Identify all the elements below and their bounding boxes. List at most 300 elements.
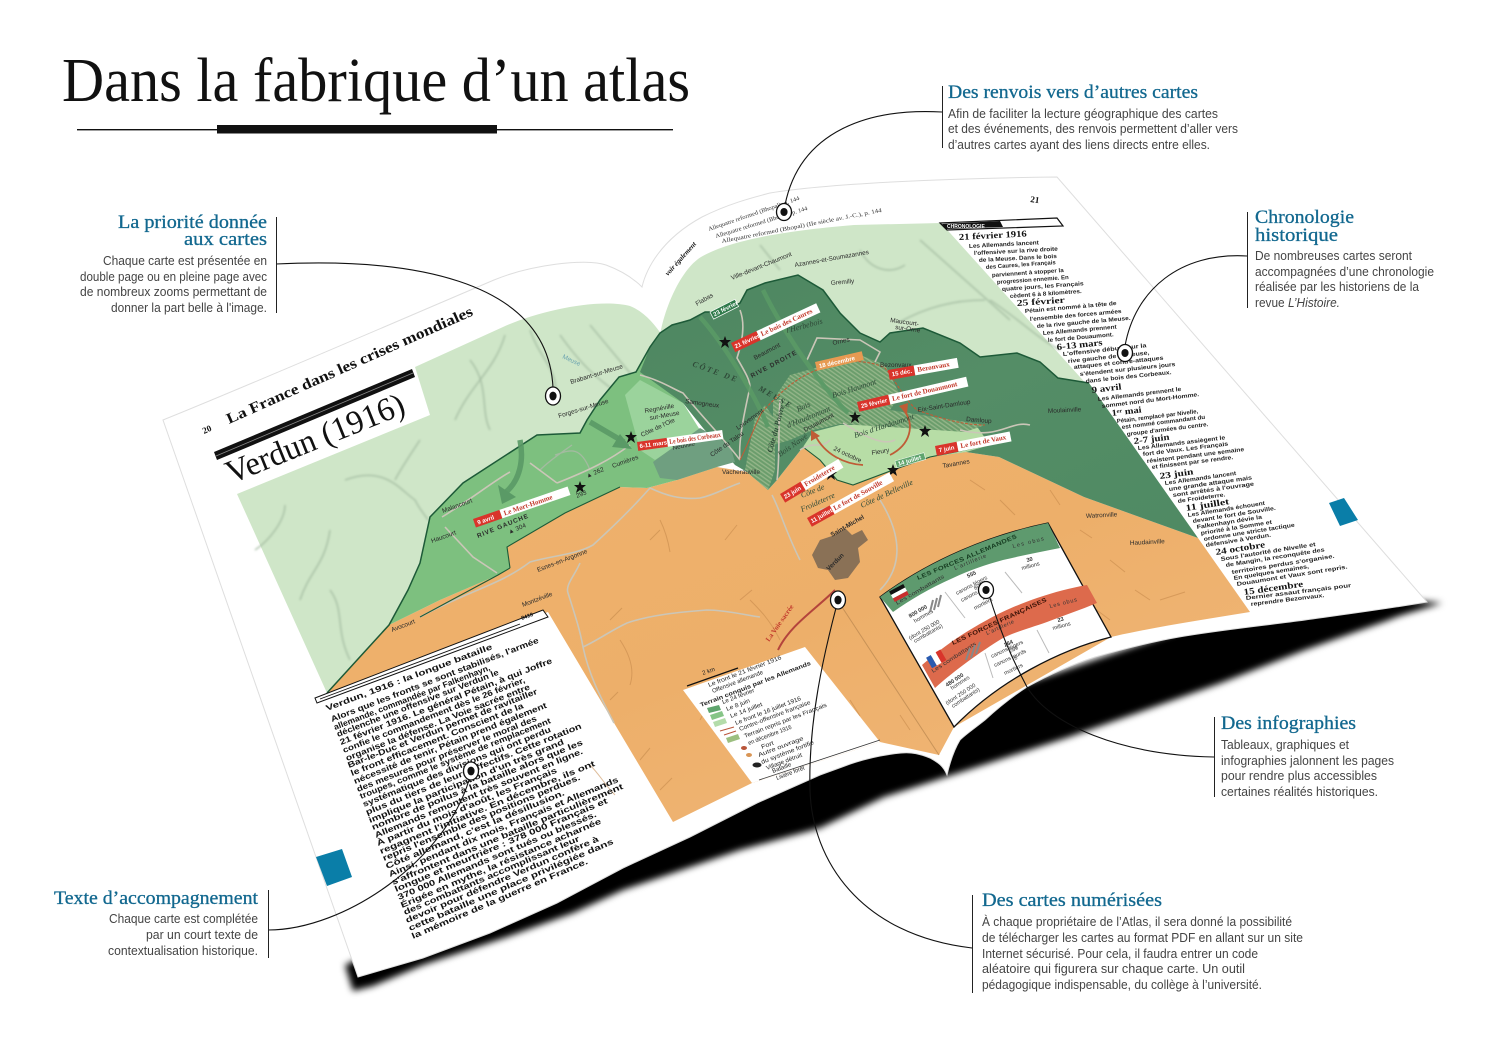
infographic panel: 800 000	[908, 604, 929, 620]
callout: texte d'accompagnement: Chaque carte est complétée	[109, 912, 258, 926]
callout: des infographies: infographies jalonnent les pages	[1221, 754, 1394, 768]
callout: des renvois vers d'autres cartes: Des renvois vers d’autres cartes	[948, 82, 1198, 103]
red battle labels: Le fort de Douaumont	[891, 380, 959, 403]
right page header and chronology column: 21	[1030, 194, 1041, 205]
infographic panel: LES FORCES ALLEMANDES	[916, 534, 1018, 582]
map place names: Louvemont	[735, 408, 765, 432]
right page header and chronology column: En quelques semaines,	[1233, 564, 1310, 582]
right page header and chronology column: 9 avril	[1091, 381, 1123, 395]
accompanying text box: Verdun, 1916 : la longue bataille	[325, 642, 494, 713]
map place names: Avocourt	[390, 618, 416, 634]
legend: du système fortifié	[761, 740, 816, 766]
red battle labels: 21 février	[734, 333, 761, 350]
map place names: Ornes	[832, 336, 850, 347]
red battle labels: 14 juillet	[897, 455, 922, 468]
right page header and chronology column: Les Allemands prennent	[1043, 325, 1117, 337]
red battle labels: Le fort de Souville	[832, 479, 884, 512]
right page header and chronology column: 21 février 1916	[959, 228, 1028, 242]
map place names: La Voie sacrée	[764, 603, 795, 643]
right page header and chronology column: Les Allemands prennent le	[1098, 387, 1182, 403]
callout: la priorité donnée aux cartes: aux cartes	[184, 229, 267, 250]
red battle labels: Le bois des Corbeaux	[669, 431, 722, 446]
right page header and chronology column: le fort de Douaumont.	[1048, 332, 1114, 344]
callout: texte d'accompagnement: par un court texte de	[146, 928, 258, 942]
right page header and chronology column: reprendre Bezonvaux.	[1251, 593, 1325, 608]
right page header and chronology column: est nommé commandant du	[1122, 415, 1206, 431]
callout line: renvois	[776, 112, 942, 220]
legend: en décembre 1916	[748, 725, 793, 747]
accompanying text box: longue et meurtrière : 378 000 Français et	[393, 796, 609, 894]
map place names: Watronville	[1086, 511, 1118, 520]
infographic panel: canons légers	[990, 640, 1025, 660]
accompanying text box: regagnent l'initiative. En décembre, ils ont	[378, 759, 597, 856]
right page header and chronology column: Dernier assaut français pour	[1246, 583, 1352, 602]
map place names: Bois Nawé	[776, 431, 810, 459]
red battle labels: 9 avril	[477, 515, 495, 527]
infographic panel: 480 000	[945, 673, 965, 689]
accompanying text box	[315, 610, 625, 941]
infographic panel: L'artillerie	[954, 554, 987, 572]
map place names: 293	[575, 489, 588, 500]
right page header and chronology column: Pétain est nommé à la tête de	[1025, 301, 1118, 315]
battle stars	[574, 336, 931, 493]
map place names: Brabant-sur-Meuse	[570, 363, 624, 386]
map place names: Côte de Belleville	[859, 477, 915, 510]
map place names: Samogneux	[685, 398, 720, 410]
infographic panel: 23	[1057, 617, 1065, 624]
light green zone near Charny	[625, 380, 700, 460]
map place names: Côte de l'Oie	[640, 417, 677, 439]
callout: chronologie historique: Chronologie	[1255, 207, 1354, 228]
map place names: Maucourt-	[890, 317, 919, 328]
red battle labels	[473, 299, 1012, 528]
right page header and chronology column: 23 juin	[1159, 466, 1194, 481]
accompanying text box: la mémoire de la guerre en France.	[410, 857, 589, 941]
Voie sacrée road	[778, 590, 835, 650]
red battle labels: Le Mort-Homme	[503, 493, 554, 517]
map place names: ▲ 262	[585, 466, 606, 480]
infographic panel: Les combattants	[931, 641, 978, 675]
right page header and chronology column: 2-7 juin	[1133, 432, 1170, 446]
right page header and chronology column	[664, 194, 1352, 608]
callout: texte d'accompagnement: Texte d’accompagnement	[54, 888, 259, 909]
accompanying text box: À partir du mois d'août, les Français	[375, 765, 559, 848]
accompanying text box: Alors que les fronts se sont stabilisés, l'armée	[329, 636, 540, 724]
right page header and chronology column: CHRONOLOGIE	[947, 224, 985, 230]
red battle labels: 23 février	[713, 300, 740, 318]
infographic panel: mortiers	[973, 597, 994, 612]
red battle labels: Bezonvaux	[917, 360, 951, 374]
map place names: Verdun	[825, 552, 846, 572]
right page header and chronology column: voir également	[664, 240, 699, 277]
page header left: La France dans les crises mondiales	[224, 304, 476, 428]
right page header and chronology column: s'étendent sur plusieurs jours	[1080, 362, 1176, 378]
callout line: chronologie	[1118, 256, 1247, 362]
map place names: Damloup	[966, 416, 992, 425]
map place names: 24 octobre	[832, 445, 863, 465]
right page header and chronology column: de la Meuse. Dans le bois	[979, 254, 1057, 264]
callout: des renvois vers d'autres cartes: d’autres cartes ayant des liens directs entre elles.	[948, 138, 1210, 152]
right page header and chronology column: Sous l'autorité de Nivelle et	[1220, 542, 1316, 563]
accompanying text box: déclenche une offensive sur Verdun le	[335, 668, 500, 739]
right page header and chronology column: une grande attaque mais	[1168, 475, 1252, 493]
map place names: RIVE DROITE	[750, 349, 799, 380]
orange terrain	[327, 447, 1250, 822]
red battle labels: 7 juin	[939, 445, 955, 454]
legend: Le 24 février	[722, 688, 755, 706]
right page header and chronology column: devant le fort de Souville.	[1192, 506, 1277, 525]
right page header and chronology column: territoires perdus s'organise.	[1231, 554, 1336, 576]
Verdun town	[812, 528, 868, 580]
marker	[830, 591, 846, 609]
German offensive arrows	[506, 290, 848, 492]
legend: Le front le 21 février 1916	[708, 655, 783, 689]
legend: Bataille	[772, 762, 793, 775]
red battle labels: 23 juin	[783, 486, 803, 501]
map place names: d'Haudromont	[785, 404, 832, 430]
infographic panel: Les obus	[1012, 536, 1045, 550]
legend: 2 km	[702, 667, 716, 677]
infographic panel: canons lourds	[960, 582, 994, 604]
infographic panel: 8	[1013, 655, 1019, 662]
map place names: sur-Orne	[895, 324, 921, 335]
blue tab left	[316, 849, 352, 886]
legend: Terrain repris par les Français	[744, 703, 828, 740]
map place names: Côte de	[799, 482, 826, 500]
infographic panel: canons légers	[955, 575, 989, 597]
callout: la priorité donnée aux cartes: double page ou en pleine page avec	[80, 270, 267, 284]
right page header and chronology column: Allequatre reformed (Bhopal), p. 144	[707, 195, 800, 233]
infographic panel: millions	[1052, 621, 1072, 632]
roads in green	[442, 310, 1030, 573]
right page header and chronology column: fort de Vaux. Les Français	[1143, 442, 1229, 458]
accompanying text box: cette bataille une place privilégiée dans	[407, 837, 615, 933]
callout: des infographies: certaines réalités historiques.	[1221, 785, 1378, 799]
light green zone near Fleury	[803, 425, 990, 485]
right page header and chronology column: résistent pendant une semaine	[1147, 447, 1245, 465]
callout: la priorité donnée aux cartes: La priorité donnée	[118, 212, 267, 233]
right page header and chronology column: des Caures, les Français	[986, 260, 1056, 271]
accompanying text box: Bar-le-Duc et Verdun permet de ravitailler	[346, 687, 540, 770]
map place names: Eix-Saint-Damloup	[917, 399, 971, 414]
right page header and chronology column: attaques et contre-attaques	[1074, 356, 1164, 371]
map place names: CÔTE DE	[691, 358, 740, 384]
infographic panel: 800	[973, 582, 984, 592]
callout: des renvois vers d'autres cartes: Afin de faciliter la lecture géographique des cartes	[948, 107, 1218, 121]
map place names: Tavannes	[942, 458, 970, 470]
callout line: cartes numérisées	[810, 591, 972, 948]
accompanying text box: allemande, commandée par Falkenhayn,	[332, 663, 492, 732]
right page header and chronology column: Les Allemands lancent	[1164, 471, 1237, 487]
map place names: Bezonvaux	[880, 362, 912, 369]
map	[237, 223, 1250, 822]
accompanying text box: confie le commandement dès le 26 février,	[341, 676, 526, 755]
marker	[776, 204, 792, 220]
callout: des cartes numérisées: pédagogique indispensable, du collège à l’université.	[982, 978, 1262, 992]
callout: des renvois vers d'autres cartes: et des événements, des renvois permettent d’aller vers	[948, 122, 1238, 136]
French flag	[926, 650, 946, 668]
legend: Le 8 juin	[726, 698, 751, 713]
infographic panel: millions	[1021, 561, 1041, 572]
right page header and chronology column: Les Allemands échouent	[1187, 501, 1265, 519]
right page header and chronology column: progression ennemie. En	[997, 275, 1069, 286]
callout: des infographies	[1214, 713, 1394, 799]
right page header and chronology column: l'offensive sur la rive droite	[974, 247, 1059, 257]
map place names: Montzéville	[521, 591, 554, 609]
right page header and chronology column: groupe d'armées du centre.	[1127, 422, 1209, 438]
accompanying text box: des mesures pour préserver le moral des	[355, 714, 539, 794]
right page header and chronology column: de la rive gauche de la Meuse.	[1037, 316, 1131, 330]
map place names: Beaumont	[753, 342, 782, 362]
callout: chronologie historique: réalisée par les historiens de la	[1255, 280, 1419, 294]
callout: la priorité donnée aux cartes	[80, 212, 277, 315]
accompanying text box: nécessité de tenir, Pétain prend également	[352, 701, 548, 786]
accompanying text box: 21 février 1916. Le général Pétain, à qui Joffre	[338, 656, 554, 747]
map place names: Côte du Talou	[709, 430, 746, 459]
callout: la priorité donnée aux cartes: Chaque carte est présentée en	[103, 254, 267, 268]
right page header and chronology column: sommet nord du Mort-Homme.	[1102, 392, 1200, 410]
infographic panel: 203	[981, 592, 992, 602]
map place names: sur-Meuse	[649, 410, 681, 422]
right page header and chronology column: Les Allemands assiègent le	[1138, 435, 1226, 452]
red battle labels: Le fort de Vaux	[960, 433, 1007, 450]
map place names: Forges-sur-Meuse	[558, 398, 610, 420]
infographic panel: 289	[1008, 645, 1019, 655]
right page header and chronology column: 11 juillet	[1185, 496, 1230, 513]
map place names: Malancourt	[441, 497, 474, 515]
infographic panel: 264	[1003, 639, 1015, 649]
legend: Fort	[761, 740, 775, 751]
page header left: 20	[201, 423, 213, 436]
callout: chronologie historique: De nombreuses cartes seront	[1255, 249, 1413, 263]
right page header and chronology column: 15 décembre	[1243, 579, 1304, 597]
legend: Contre-offensive française	[739, 700, 812, 733]
relief pale	[255, 240, 1060, 660]
callout: la priorité donnée aux cartes: donner la part belle à l'image.	[111, 301, 267, 315]
map place names: ▲ 304	[507, 522, 528, 536]
callout: des cartes numérisées	[972, 890, 1303, 993]
legend: Terrain conquis par les Allemands	[700, 661, 813, 709]
right page header and chronology column: l'ensemble des forces armées	[1030, 309, 1122, 323]
right page header and chronology column: 6-13 mars	[1056, 337, 1104, 352]
accompanying text box: plus du tiers de leurs effectifs. Cette rotation	[364, 722, 583, 817]
hill shading	[540, 445, 590, 470]
map place names: Meuse	[561, 353, 582, 368]
map place names: Haucourt	[430, 529, 457, 545]
German flag	[889, 584, 909, 602]
infographic panel: hommes	[913, 609, 935, 625]
infographic panel: (dont 250 000	[945, 683, 977, 707]
accompanying text box: nombre de poilus à la bataille alors que les	[370, 738, 585, 832]
hatch zone Douaumont	[773, 355, 985, 445]
infographic panel: canons lourds	[993, 649, 1028, 669]
mid green Rive gauche	[389, 347, 717, 625]
callout: des cartes numérisées: À chaque propriétaire de l’Atlas, il sera donné la possibilité	[982, 914, 1292, 929]
red battle labels: 18 décembre	[819, 356, 856, 370]
infographic panel: Les obus	[1049, 597, 1078, 610]
callout: des cartes numérisées: aléatoire qui figurera sur chaque carte. Un outil	[982, 962, 1245, 976]
right page header and chronology column: 25 février	[1016, 295, 1065, 308]
red battle labels: Froideterre	[803, 464, 836, 488]
accompanying text box: Allemands remontent très souvent en ligne.	[373, 747, 584, 840]
map place names: Moulainville	[1048, 406, 1082, 415]
legend: Le 14 juillet	[730, 702, 764, 720]
callout line: priorité aux cartes	[276, 263, 560, 405]
page header left: Verdun (1916)	[221, 387, 410, 491]
callout: chronologie historique	[1247, 207, 1434, 310]
infographic panel: combattants)	[951, 687, 981, 710]
callout: des cartes numérisées: Des cartes numérisées	[982, 890, 1162, 911]
grey green zone	[653, 428, 735, 480]
right page header and chronology column: quatre jours, les Français	[1002, 281, 1084, 293]
open atlas shadow	[345, 590, 1442, 991]
right page header and chronology column: ordonne une stricte tactique	[1203, 523, 1296, 543]
red battle labels: Le bois des Caures	[760, 307, 814, 338]
right page header and chronology column: Les Allemands lancent	[969, 240, 1039, 250]
red battle labels: 11 juillet	[810, 508, 834, 525]
pale green area	[237, 303, 680, 693]
callout: des infographies: Tableaux, graphiques et	[1221, 738, 1350, 752]
accompanying text box: systématique des divisions qui ont perdu	[361, 725, 552, 809]
map place names: Bois Haumont	[831, 377, 878, 400]
German band	[880, 523, 1060, 612]
map place names: Cumières	[611, 454, 639, 470]
accompanying text box: Érigée en mythe, la résistance acharnée	[399, 816, 603, 910]
blue tab right	[1329, 498, 1358, 526]
callout: chronologie historique: accompagnées d’une chronologie	[1255, 265, 1434, 279]
right page header and chronology column: dans le bois des Corbeaux.	[1086, 370, 1172, 385]
accompanying text box: 370 000 Allemands sont tués ou blessés.	[396, 810, 598, 902]
legend: Le front le 16 juillet 1916	[735, 696, 803, 727]
red battle labels: 25 février	[861, 398, 889, 410]
legend: Lisière forêt	[776, 765, 806, 782]
right page header and chronology column: rive gauche de la Meuse,	[1068, 350, 1150, 365]
marker	[546, 387, 560, 405]
accompanying text box: s'affrontent dans une bataille particulièrement	[390, 782, 625, 887]
red battle labels: 15 déc.	[891, 369, 913, 378]
callout: des infographies: Des infographies	[1221, 713, 1356, 734]
callout: texte d'accompagnement: contextualisation historique.	[108, 944, 258, 958]
map place names: Saint-Michel	[830, 514, 866, 539]
map place names: Flabas	[694, 292, 715, 308]
right page header and chronology column: cèdent 6 à 8 kilomètres.	[1010, 289, 1082, 300]
red battle labels: 6-11 mars	[639, 440, 668, 450]
callout: la priorité donnée aux cartes: de nombreux zooms permettant de	[80, 285, 267, 299]
map place names	[390, 249, 1165, 643]
legend: Village détruit	[766, 753, 804, 772]
accompanying text box: le front efficacement. Conscient de la	[349, 701, 525, 778]
legend: Autre ouvrage	[758, 736, 805, 759]
callout: des renvois vers d'autres cartes	[942, 82, 1238, 152]
accompanying text box: organise la défense. La Voie sacrée entre	[344, 682, 532, 763]
hatch strip	[745, 405, 775, 490]
map place names: Azannes-et-Soumazannes	[794, 249, 870, 269]
accompanying text box: Ainsi, pendant dix mois, Français et Allemands	[387, 775, 620, 879]
callout: chronologie historique: revue L’Histoire.	[1255, 296, 1340, 310]
open atlas pages	[163, 177, 1427, 977]
marker	[1118, 344, 1132, 362]
infographic panel: hommes	[950, 675, 971, 692]
map place names: Esnes-en-Argonne	[536, 548, 589, 574]
callout: texte d'accompagnement	[54, 888, 269, 958]
right page header and chronology column: Falkenhayn dévie la	[1196, 515, 1263, 531]
accompanying text box: devoir pour défendre Verdun confère à	[404, 834, 601, 925]
right page header and chronology column: de Froideterre.	[1177, 492, 1226, 505]
callout line: infographies	[978, 582, 1214, 757]
relief orange	[420, 480, 1185, 795]
pale green area right page	[660, 223, 1089, 420]
right page header and chronology column: de Mangin, la reconquête des	[1225, 547, 1325, 569]
map place names: Gremilly	[831, 278, 855, 287]
page header left	[201, 304, 476, 491]
accompanying text box: repris l'ensemble des positions perdues.	[381, 773, 582, 863]
callout: des infographies: pour rendre plus accessibles	[1221, 769, 1377, 783]
callout: des cartes numérisées: de télécharger les cartes au format PDF en allant sur un site	[982, 931, 1303, 945]
right page header and chronology column: sont arrêtés à l'ouvrage	[1172, 481, 1255, 499]
map place names: Ville-devant-Chaumont	[730, 251, 793, 282]
accompanying text box: troupes, comme le système de remplacement	[358, 716, 552, 801]
accompanying text box: Côté allemand, c'est la désillusion.	[384, 788, 566, 871]
right page header and chronology column: défensive à Verdun.	[1205, 533, 1272, 549]
right page header and chronology column: Allequatre reformed (Bhopal) (IIe siècle av. J.-C.), p. 144	[721, 207, 882, 245]
map place names: Regnéville	[644, 403, 675, 415]
infographic panel: 30	[1026, 557, 1034, 564]
right page header and chronology column: Pétain, remplacé par Nivelle,	[1117, 409, 1199, 425]
accompanying text box: des combattants accomplissant leur	[402, 834, 582, 917]
map place names: MEUSE	[756, 383, 794, 411]
infographic panel: (dont 250 000	[908, 619, 941, 642]
marker	[978, 582, 994, 598]
map place names: Bois	[795, 400, 812, 414]
map place names: Neuville	[672, 440, 696, 452]
map place names: Haudainville	[1130, 538, 1165, 547]
infographic panel: 555	[966, 570, 977, 580]
accompanying text box: 8410	[521, 612, 534, 622]
infographic panel	[880, 523, 1111, 727]
right page header and chronology column: Allequatre reformed (Bhopal), p. 144	[715, 205, 808, 240]
map place names: Côte du Poivre	[765, 404, 787, 454]
French counter arrows	[740, 362, 985, 465]
infographic panel: mortiers	[1003, 663, 1024, 677]
legend	[683, 647, 880, 783]
callout line: texte d'accompagnement	[268, 762, 478, 930]
infographic panel: combattants)	[913, 623, 944, 645]
legend: Offensive allemande	[712, 670, 765, 695]
callout: chronologie historique: historique	[1255, 225, 1338, 246]
map place names: Froideterre	[798, 490, 837, 514]
map place names: Fleury	[871, 447, 891, 457]
map place names: Douaumont	[803, 412, 835, 434]
accompanying text box: implique la participation d'un très grand	[367, 738, 565, 825]
marker	[464, 762, 478, 780]
right page header and chronology column: 24 octobre	[1215, 539, 1266, 557]
map place names: RIVE GAUCHE	[476, 513, 530, 540]
infographic panel: L'artillerie	[985, 619, 1015, 637]
map place names: Bois d'Hardaumont	[853, 412, 916, 440]
right page header and chronology column: priorité à la Somme et	[1200, 520, 1272, 537]
front line	[327, 275, 1089, 693]
title: Dans la fabrique d’un atlas	[62, 47, 690, 115]
dark green ridge	[640, 275, 1198, 538]
right page header and chronology column: Douaumont et Vaux sont repris.	[1236, 564, 1348, 588]
right page header and chronology column: 1ᵉʳ mai	[1111, 404, 1143, 418]
right page header and chronology column: et finissent par se rendre.	[1152, 455, 1234, 471]
map place names: Vacherauville	[722, 469, 760, 476]
callout: des cartes numérisées: Internet sécurisé. Pour cela, il faudra entrer un code	[982, 947, 1258, 961]
infographic panel: Les combattants	[895, 574, 946, 607]
right page header and chronology column: parviennent à stopper la	[992, 268, 1065, 279]
French band	[922, 585, 1097, 688]
